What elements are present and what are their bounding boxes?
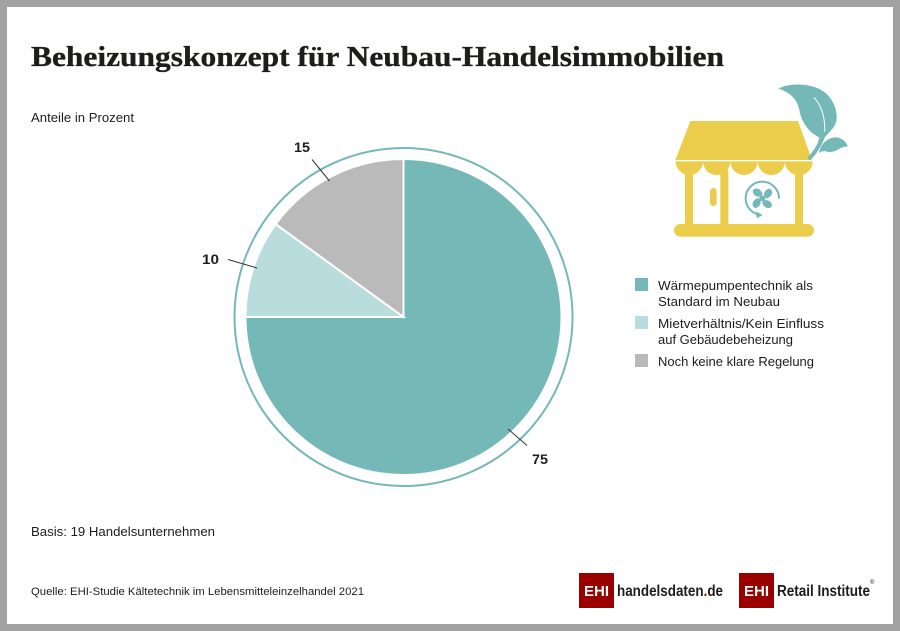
leader line 75: [508, 429, 527, 446]
leaf vein: [814, 97, 825, 132]
large leaf: [778, 84, 837, 160]
fan circular arrow: [746, 182, 779, 215]
legend swatch: Mietverhältnis: [635, 316, 648, 329]
legend text: Noch keine klare Regelung: Noch keine klare Regelung: [658, 355, 814, 369]
logo: EHI Retail Institute: Retail Institute: [777, 583, 870, 600]
leader line 15: [312, 160, 330, 181]
value label 75: 75: [532, 451, 548, 467]
base note: Basis: 19 Handelsunternehmen: [31, 525, 215, 539]
logo: EHI handelsdaten.de: EHI: [584, 583, 609, 600]
shop base: [674, 224, 814, 237]
fan blades: [751, 187, 774, 210]
logo: EHI handelsdaten.de: [579, 573, 723, 608]
value label 15: 15: [294, 139, 310, 155]
shop awning scallops: [676, 161, 813, 175]
source note: Quelle: EHI-Studie Kältetechnik im Lebensmitteleinzelhandel 2021: [31, 586, 364, 598]
shop posts: [685, 170, 803, 227]
leader line 10: [228, 260, 257, 268]
legend text: Wärmepumpentechnik: Standard im Neubau: [658, 295, 780, 309]
pie outer ring: [234, 148, 572, 486]
small leaf: [819, 137, 848, 153]
shop roof: [675, 121, 812, 160]
fan icon: [746, 182, 779, 218]
door handle: [710, 188, 717, 206]
logo: EHI Retail Institute: [739, 573, 875, 608]
legend swatch: Noch keine klare Regelung: [635, 354, 648, 367]
value label 10: 10: [202, 251, 219, 267]
legend swatch: Wärmepumpentechnik: [635, 278, 648, 291]
slice: 75 percent: [246, 159, 562, 475]
legend text: Mietverhältnis: auf Gebäudebeheizung: [658, 333, 793, 347]
legend: [635, 278, 824, 369]
logo: EHI Retail Institute: EHI: [744, 583, 769, 600]
logo: EHI handelsdaten.de: handelsdaten.de: [617, 583, 723, 600]
title: Beheizungskonzept für Neubau-Handelsimmobilien: [31, 41, 724, 73]
slice: 15 percent: [276, 159, 404, 317]
icon: shop with leaves and heat pump fan: [674, 84, 848, 237]
logo: EHI Retail Institute: ®: [870, 579, 875, 586]
slice: 10 percent: [246, 224, 404, 317]
legend text: Wärmepumpentechnik: Wärmepumpentechnik als: [658, 279, 813, 293]
pie chart: [202, 139, 572, 486]
subtitle: units: Anteile in Prozent: [31, 111, 135, 125]
legend text: Mietverhältnis: Mietverhältnis/Kein Einfluss: [658, 317, 824, 331]
